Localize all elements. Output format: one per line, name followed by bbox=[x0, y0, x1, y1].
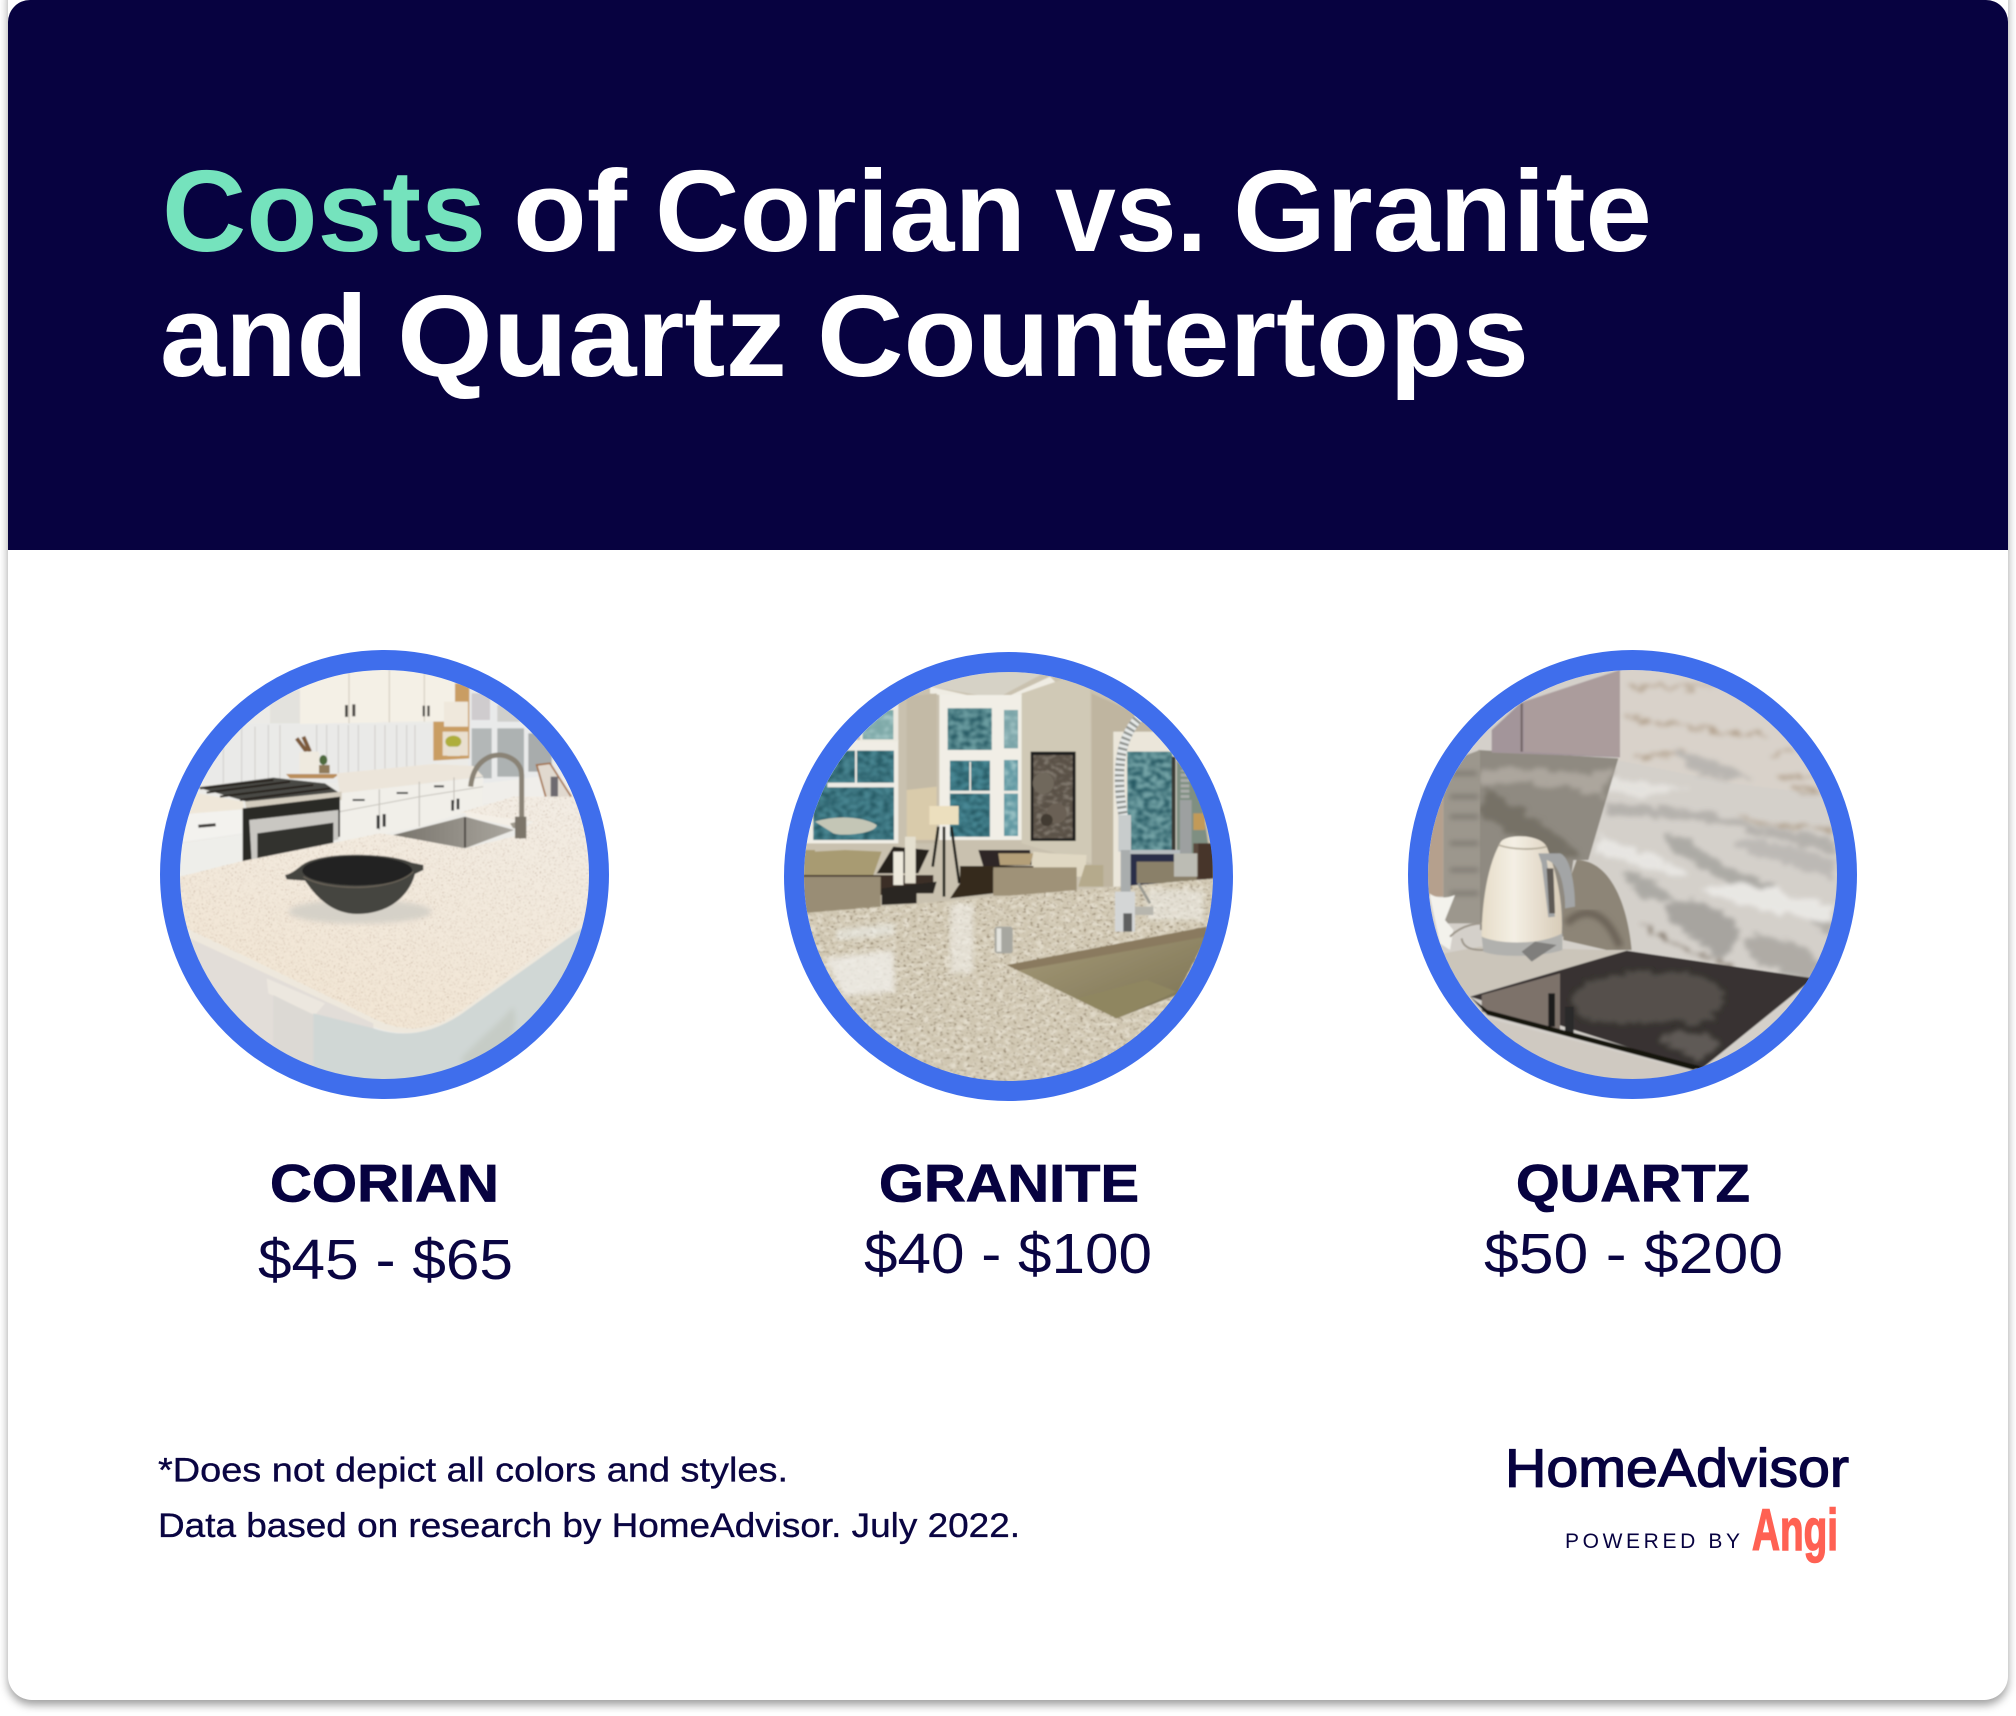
panel: granite bbox=[794, 662, 1223, 1286]
label: QUARTZ bbox=[1516, 1154, 1750, 1214]
blue ring bbox=[1418, 660, 1847, 1089]
logo: HomeAdvisor powered by Angi: HomeAdvisor bbox=[1505, 1438, 1849, 1498]
price: $50 - $200 bbox=[1484, 1222, 1783, 1286]
blue ring bbox=[794, 662, 1223, 1091]
title: and bbox=[160, 271, 368, 401]
title: of bbox=[513, 146, 627, 276]
title bbox=[160, 146, 1652, 401]
photo: corian kitchen counter bbox=[173, 663, 598, 1097]
price: $40 - $100 bbox=[864, 1222, 1152, 1286]
logo: HomeAdvisor powered by Angi bbox=[1505, 1438, 1849, 1563]
label: CORIAN bbox=[270, 1154, 499, 1214]
blue ring bbox=[170, 660, 599, 1089]
infographic artwork bbox=[158, 167, 1857, 1564]
title: vs. bbox=[1055, 146, 1207, 276]
header band bbox=[8, 0, 2008, 550]
title: Quartz bbox=[397, 271, 787, 401]
footnote: Data based on research by HomeAdvisor. July 2022. bbox=[158, 1507, 1020, 1545]
photo: granite counter and living room bbox=[800, 667, 1223, 1090]
title: Countertops bbox=[817, 271, 1529, 401]
photo: quartz backsplash with kettle bbox=[1423, 663, 1847, 1097]
title: Costs bbox=[162, 146, 486, 276]
footnote bbox=[158, 1452, 1020, 1545]
title: Granite bbox=[1233, 146, 1652, 276]
price: $45 - $65 bbox=[258, 1228, 513, 1292]
footnote: *Does not depict all colors and styles. bbox=[158, 1452, 788, 1490]
label: GRANITE bbox=[879, 1154, 1139, 1214]
panel: corian bbox=[170, 660, 599, 1292]
logo: HomeAdvisor powered by Angi: Angi bbox=[1752, 1498, 1838, 1563]
title: Corian bbox=[655, 146, 1026, 276]
panel: quartz bbox=[1418, 660, 1847, 1286]
logo: HomeAdvisor powered by Angi: POWERED BY bbox=[1565, 1530, 1740, 1553]
